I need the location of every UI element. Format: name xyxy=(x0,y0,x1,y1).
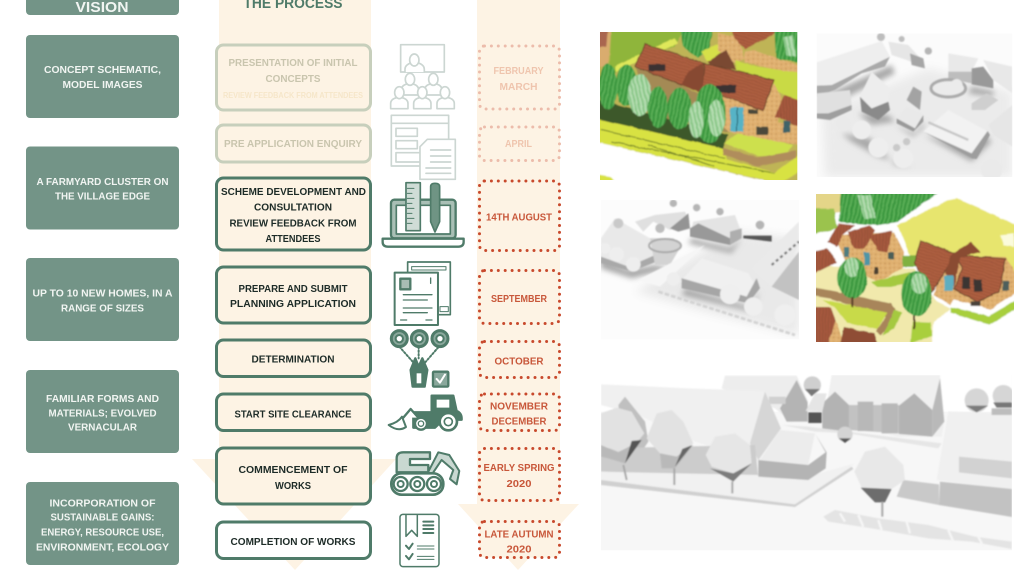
date: october xyxy=(480,342,560,378)
vision card: sustainable gains: INCORPORATION OF xyxy=(50,498,156,510)
icon: online form and document xyxy=(391,115,455,179)
vision card: farmyard cluster xyxy=(26,146,179,230)
vision card: farmyard cluster: A FARMYARD CLUSTER ON xyxy=(36,176,168,188)
date: february march xyxy=(480,46,560,109)
panel: vision column xyxy=(26,0,179,565)
step: presentation of initial concepts: REVIEW FEEDBACK FROM ATTENDEES xyxy=(223,91,364,100)
icon: checklist document xyxy=(400,514,439,567)
date: september xyxy=(480,270,560,324)
icon: laptop with ruler and pencil xyxy=(383,183,464,247)
dates timeline arrow band xyxy=(458,0,579,570)
date: early spring 2020: EARLY SPRING xyxy=(484,462,554,474)
date: late autumn 2020: 2020 xyxy=(506,544,532,556)
vision card: sustainable gains: SUSTAINABLE GAINS: xyxy=(50,512,154,524)
panel: concept images xyxy=(595,27,1024,550)
date: early spring 2020 xyxy=(480,448,560,500)
vision card: forms and materials: VERNACULAR xyxy=(68,422,137,434)
vision card: concept schematic xyxy=(26,35,179,118)
step: start site clearance xyxy=(216,394,370,430)
step: scheme development xyxy=(216,178,370,250)
vision card: new homes xyxy=(26,258,179,341)
step: prepare and submit: PREPARE AND SUBMIT xyxy=(238,283,348,295)
date: 14th august: 14TH AUGUST xyxy=(486,212,553,224)
vision card: sustainable gains: ENERGY, RESOURCE USE, xyxy=(41,527,164,539)
date: november december: NOVEMBER xyxy=(490,401,548,413)
date: september: SEPTEMBER xyxy=(491,293,547,305)
step: determination xyxy=(216,340,370,376)
image: grey massing model, close view xyxy=(601,375,1014,550)
vision heading xyxy=(26,0,179,16)
date: april xyxy=(480,127,560,160)
step: scheme development: REVIEW FEEDBACK FROM xyxy=(230,218,357,230)
vision card: forms and materials xyxy=(26,370,179,453)
image: colour sketch of cottages with lawn xyxy=(816,194,1014,342)
date: april: APRIL xyxy=(505,138,533,150)
step: completion of works xyxy=(216,522,370,558)
step: prepare and submit: PLANNING APPLICATION xyxy=(230,298,356,310)
date: early spring 2020: 2020 xyxy=(506,478,532,490)
vision card: forms and materials: FAMILIAR FORMS AND xyxy=(46,393,159,405)
vision card: sustainable gains: ENVIRONMENT, ECOLOGY xyxy=(36,542,169,554)
icon: tracked excavator xyxy=(391,452,459,495)
icon: front loader tractor xyxy=(389,396,462,430)
panel: dates xyxy=(480,46,560,558)
step: scheme development: SCHEME DEVELOPMENT AND xyxy=(221,186,366,198)
process timeline arrow band xyxy=(192,0,396,570)
icon: planning application documents xyxy=(395,262,450,325)
image: grey massing model, aerial xyxy=(817,33,1012,181)
step: scheme development: ATTENDEES xyxy=(266,233,320,245)
date: 14th august xyxy=(480,181,560,250)
vision card: farmyard cluster: THE VILLAGE EDGE xyxy=(55,190,150,202)
image: grey massing model, street view xyxy=(600,200,799,339)
vision card: new homes: RANGE OF SIZES xyxy=(61,302,144,314)
step: presentation of initial concepts: PRESENTATION OF INITIAL xyxy=(228,57,358,69)
date: november december xyxy=(480,394,560,430)
step: presentation of initial concepts xyxy=(216,45,370,110)
step: determination: DETERMINATION xyxy=(252,354,334,366)
date: late autumn 2020 xyxy=(480,522,560,558)
panel: process steps xyxy=(216,45,370,558)
step: pre application enquiry xyxy=(216,125,370,162)
vision card: concept schematic: MODEL IMAGES xyxy=(62,79,142,91)
icon: determination decision xyxy=(391,331,448,387)
vision card: sustainable gains xyxy=(26,482,179,565)
panel: process icons xyxy=(383,45,464,567)
vision card: new homes: UP TO 10 NEW HOMES, IN A xyxy=(32,288,173,300)
vision card: concept schematic: CONCEPT SCHEMATIC, xyxy=(44,64,161,76)
step: completion of works: COMPLETION OF WORKS xyxy=(230,536,356,548)
step: commencement of works: WORKS xyxy=(275,480,311,492)
icon: presentation to audience xyxy=(391,45,454,109)
image: colour sketch of houses behind trees xyxy=(600,32,798,180)
date: late autumn 2020: LATE AUTUMN xyxy=(484,529,554,541)
step: prepare and submit xyxy=(216,267,370,323)
step: presentation of initial concepts: CONCEPTS xyxy=(266,73,320,85)
date: october: OCTOBER xyxy=(494,356,544,368)
date: february march: MARCH xyxy=(500,81,538,93)
step: commencement of works: COMMENCEMENT OF xyxy=(238,464,348,476)
date: november december: DECEMBER xyxy=(492,416,547,428)
step: start site clearance: START SITE CLEARANCE xyxy=(234,408,352,420)
date: february march: FEBRUARY xyxy=(494,65,544,77)
vision card: forms and materials: MATERIALS; EVOLVED xyxy=(48,408,157,420)
step: commencement of works xyxy=(216,448,370,504)
step: pre application enquiry: PRE APPLICATION ENQUIRY xyxy=(224,138,362,150)
step: scheme development: CONSULTATION xyxy=(254,202,332,214)
